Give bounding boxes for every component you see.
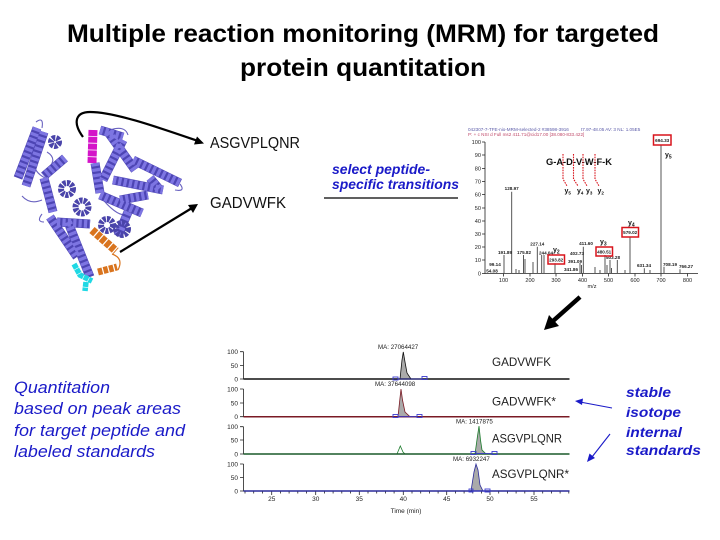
spectrum peak labels: 244.04	[539, 250, 553, 256]
caption: select peptide-specific transitions	[332, 162, 459, 192]
y-ion labels: 4	[632, 222, 635, 228]
spectrum axis labels: 100	[472, 140, 481, 146]
arrow: transitions line	[324, 197, 458, 199]
straight arrow to GADVWFK	[120, 204, 198, 252]
caption: select peptide-specific transitions: specific transitions	[332, 177, 459, 192]
time axis labels: 30	[312, 496, 320, 503]
trace: GADVWFK	[244, 344, 570, 380]
time axis labels: 40	[400, 496, 407, 503]
spectrum axis labels: 40	[475, 219, 481, 225]
spectrum axis labels: 50	[475, 206, 481, 212]
spectrum peak labels: 227.14	[530, 242, 545, 246]
spectrum peak labels: 708.19	[663, 262, 677, 267]
chromatogram y labels: 0	[234, 376, 238, 384]
spectrum header: P: + c NSI d Full ms2 411.71@cid17.00 [38.080-833.422]	[468, 132, 584, 137]
spectrum axis labels: 60	[475, 192, 481, 198]
protein ribbon structure	[18, 120, 182, 291]
spectrum axis labels	[472, 140, 481, 278]
spectrum header: t7.97-48.05 AV: 3 NL: 1.05E5	[581, 127, 641, 132]
right note: stable isotope internal standards	[626, 384, 701, 458]
peptide sequence: G-A-D-V-W-F-K	[546, 157, 612, 168]
trace: ASGVPLQNR*	[244, 456, 570, 492]
y-ion labels: y	[628, 220, 632, 227]
fragment labels: 2	[601, 190, 604, 196]
cyan peptide helix	[74, 264, 92, 291]
right note: stable isotope internal standards: stable	[626, 384, 671, 400]
left note: quantitation: Quantitation	[14, 378, 110, 397]
y-ion labels: y	[600, 239, 604, 246]
spectrum x labels: 500	[604, 278, 613, 284]
trace: GADVWFK*: MA: 37644098	[375, 381, 416, 388]
spectrum header: 042307-7-TFE-nio-MRM-selected-2 #38598-3916	[468, 127, 569, 132]
left note: quantitation: based on peak areas	[14, 399, 182, 418]
spectrum peak labels: 503.28	[606, 255, 620, 260]
trace: GADVWFK: GADVWFK	[492, 355, 551, 369]
spectrum header	[468, 127, 641, 137]
spectrum axes	[482, 142, 698, 276]
trace: ASGVPLQNR	[244, 418, 570, 454]
trace: GADVWFK: MA: 27064427	[378, 344, 419, 351]
magenta peptide helix	[92, 130, 93, 163]
highlighted fragment boxes	[548, 135, 671, 264]
chromatogram y labels: 0	[234, 414, 238, 421]
trace: GADVWFK*	[244, 381, 570, 418]
spectrum x labels: 700	[656, 278, 666, 284]
spectrum x labels	[499, 278, 692, 290]
spectrum peak labels: 341.86	[564, 267, 578, 272]
chromatogram y labels: 0	[234, 488, 238, 496]
chromatogram y labels: 50	[231, 475, 238, 482]
fragment labels: y	[598, 188, 601, 195]
spectrum x labels: m/z	[587, 284, 597, 290]
blue arrows to labeled peptides	[575, 398, 612, 462]
spectrum x labels: 300	[551, 278, 561, 284]
spectrum axis labels: 90	[475, 153, 481, 159]
spectrum peak labels: 128.97	[505, 186, 519, 191]
spectrum axis labels: 20	[475, 245, 481, 251]
right note: stable isotope internal standards: internal	[626, 424, 683, 440]
fragment labels	[564, 188, 604, 196]
orange peptide helix	[92, 230, 120, 272]
spectrum x labels: 400	[578, 278, 587, 284]
y-ion labels: 5	[669, 154, 672, 160]
time axis labels: 55	[530, 496, 538, 503]
trace: ASGVPLQNR*: ASGVPLQNR*	[492, 467, 569, 481]
helix rings	[51, 138, 128, 235]
left note: quantitation	[14, 378, 186, 461]
right note: stable isotope internal standards: standards	[626, 442, 701, 458]
fragment labels: y	[577, 188, 581, 195]
spectrum axis labels: 30	[475, 232, 481, 238]
spectrum peak labels	[486, 186, 693, 274]
y-ion labels: y	[553, 247, 557, 254]
title: Multiple reaction monitoring (MRM) for targeted	[67, 20, 659, 48]
spectrum peak labels: 175.82	[517, 250, 531, 255]
spectrum peak labels: 54.08	[486, 268, 498, 274]
spectrum peak labels: 631.34	[637, 263, 651, 268]
chromatogram y labels: 0	[234, 452, 238, 458]
time axis labels: 35	[356, 496, 363, 503]
y-ion labels: 2	[557, 250, 560, 256]
spectrum x labels: 600	[630, 278, 640, 284]
chromatogram y labels: 50	[231, 438, 238, 444]
y-ion labels: 3	[604, 242, 607, 248]
fragment labels: y	[586, 188, 590, 195]
chromatogram y labels: 50	[231, 363, 238, 370]
time axis labels: 50	[486, 496, 494, 503]
highlighted fragment boxes: 579.02	[623, 230, 638, 235]
MS/MS spectrum	[468, 127, 698, 290]
chromatogram y labels: 100	[227, 424, 238, 431]
time axis labels	[268, 496, 538, 515]
label: GADVWFK: GADVWFK	[210, 195, 286, 212]
left note: quantitation: labeled standards	[14, 442, 156, 461]
highlighted fragment boxes: 293.82	[549, 257, 564, 262]
trace: ASGVPLQNR: ASGVPLQNR	[492, 432, 562, 446]
spectrum peak labels: 402.73	[570, 251, 584, 256]
trace: ASGVPLQNR*: MA: 6932247	[453, 456, 490, 463]
chromatogram y labels: 50	[231, 400, 238, 408]
chromatogram axes	[240, 352, 569, 495]
fragment labels: y	[564, 188, 568, 195]
label: ASGVPLQNR: ASGVPLQNR	[210, 135, 300, 152]
spectrum x labels: 200	[525, 278, 535, 284]
y-ion labels: y	[665, 152, 669, 159]
spectrum axis labels: 80	[475, 166, 481, 172]
spectrum x labels: 100	[499, 278, 508, 284]
trace: GADVWFK*: GADVWFK*	[492, 395, 556, 409]
chromatogram y labels: 100	[227, 462, 238, 468]
chromatogram y labels: 100	[227, 386, 238, 394]
spectrum axis labels: 10	[475, 258, 481, 264]
spectrum axis labels: 0	[478, 272, 481, 278]
spectrum peak labels: 766.27	[679, 264, 693, 269]
left note: quantitation: for target peptide and	[14, 421, 186, 440]
spectrum peaks	[504, 145, 680, 273]
title: protein quantitation	[240, 54, 486, 82]
spectrum x labels: 800	[683, 278, 692, 284]
trace: ASGVPLQNR: MA: 1417875	[456, 418, 493, 426]
spectrum peak labels: 391.09	[568, 259, 582, 264]
spectrum axis labels: 70	[475, 180, 481, 186]
highlighted fragment boxes: 480.51	[597, 249, 612, 254]
time axis labels: Time (min)	[391, 508, 421, 515]
y-ion labels	[553, 152, 672, 256]
highlighted fragment boxes: 694.33	[655, 138, 670, 143]
fragment labels: 3	[590, 190, 593, 196]
spectrum peak labels: 191.89	[498, 250, 512, 255]
spectrum peak labels: 411.60	[579, 241, 593, 246]
title	[67, 20, 659, 82]
chromatograms	[227, 344, 570, 515]
fragment labels: 4	[581, 190, 584, 196]
time axis labels: 25	[268, 496, 276, 503]
spectrum peak labels: 99.14	[489, 262, 501, 267]
chromatogram y labels: 100	[227, 349, 238, 356]
fragmentation dashes	[563, 154, 599, 186]
right note: stable isotope internal standards: isotope	[626, 404, 681, 420]
curved arrow to ASGVPLQNR	[77, 112, 204, 144]
caption: select peptide-specific transitions: select peptide-	[332, 162, 431, 177]
chromatogram y labels	[227, 349, 238, 496]
fragment labels: 5	[568, 190, 571, 196]
big arrow: spectrum to chromatograms	[544, 297, 580, 330]
time axis labels: 45	[443, 496, 451, 503]
